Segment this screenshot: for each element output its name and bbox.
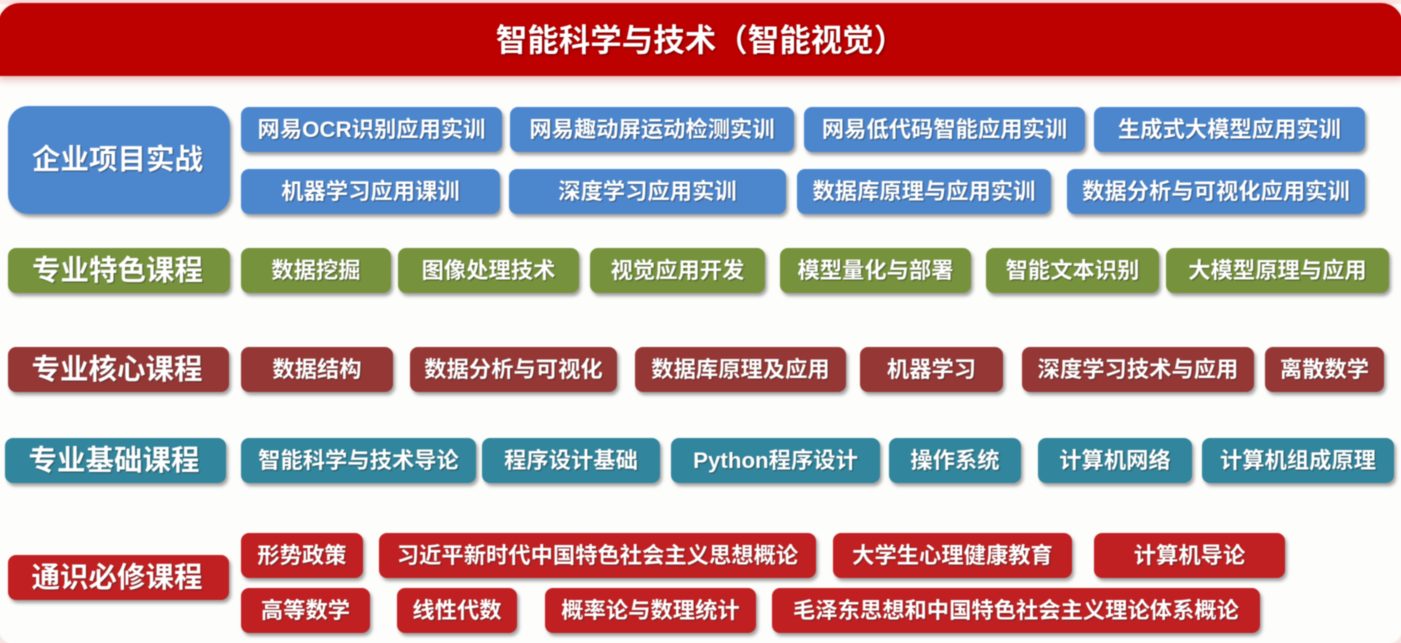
chip: 数据分析与可视化应用实训: 数据分析与可视化应用实训	[1082, 179, 1350, 204]
chip: 操作系统: 操作系统	[910, 448, 1000, 473]
chip: 数据挖掘: 数据挖掘	[271, 258, 361, 283]
row label: 通识必修课程: 通识必修课程	[31, 562, 202, 594]
row label: 企业项目实战	[8, 106, 230, 214]
chip: 离散数学: 离散数学	[1280, 357, 1369, 382]
row label: 企业项目实战: 企业项目实战	[32, 144, 203, 176]
chip: 机器学习应用课训: 机器学习应用课训	[281, 179, 460, 204]
row label: 专业核心课程	[8, 347, 229, 392]
chip: 数据挖掘	[241, 248, 391, 293]
panel: 通识必修课程	[7, 532, 1290, 638]
chip: 模型量化与部署: 模型量化与部署	[797, 258, 954, 283]
chip: 机器学习: 机器学习	[887, 357, 976, 382]
chip: 大模型原理与应用	[1166, 248, 1389, 293]
chip: 形势政策	[241, 533, 363, 578]
row label: 专业核心课程: 专业核心课程	[31, 354, 202, 386]
chip: 程序设计基础	[482, 438, 660, 483]
chip: 计算机导论: 计算机导论	[1134, 543, 1245, 568]
chip: 图像处理技术: 图像处理技术	[422, 258, 555, 283]
chip: 数据分析与可视化: 数据分析与可视化	[424, 357, 603, 382]
chip: 图像处理技术	[398, 248, 579, 293]
chip: 概率论与数理统计: 概率论与数理统计	[561, 598, 740, 623]
chip: 视觉应用开发: 视觉应用开发	[611, 258, 744, 283]
chip: 生成式大模型应用实训: 生成式大模型应用实训	[1118, 117, 1341, 142]
chip: 程序设计基础: 程序设计基础	[504, 448, 638, 473]
chip: 数据结构	[241, 347, 393, 392]
chip: 大模型原理与应用: 大模型原理与应用	[1188, 258, 1367, 283]
chip: 毛泽东思想和中国特色社会主义理论体系概论	[772, 588, 1260, 633]
chip: 计算机导论	[1094, 533, 1285, 578]
chip: 习近平新时代中国特色社会主义思想概论	[379, 533, 816, 578]
chip: 生成式大模型应用实训	[1094, 107, 1365, 152]
chip: 网易OCR识别应用实训	[241, 107, 502, 152]
chip: 智能科学与技术导论: 智能科学与技术导论	[258, 448, 459, 473]
chip: 深度学习应用实训	[509, 169, 786, 214]
chip: 机器学习应用课训	[241, 169, 500, 214]
chip: 形势政策: 形势政策	[257, 543, 347, 568]
chip: 深度学习技术与应用: 深度学习技术与应用	[1038, 357, 1238, 382]
row label: 专业特色课程	[8, 248, 230, 293]
chip: 数据分析与可视化应用实训	[1067, 169, 1365, 214]
chip: 智能文本识别: 智能文本识别	[1006, 258, 1139, 283]
chip: 计算机网络: 计算机网络	[1059, 448, 1171, 473]
chip: 网易OCR识别应用实训: 网易OCR识别应用实训	[258, 117, 485, 142]
chip: 计算机网络	[1038, 438, 1192, 483]
chip: 线性代数	[397, 588, 517, 633]
chip: 数据库原理与应用实训	[797, 169, 1051, 214]
chip: 深度学习应用实训: 深度学习应用实训	[558, 179, 737, 204]
chip: 网易低代码智能应用实训	[804, 107, 1085, 152]
chip: 离散数学	[1265, 347, 1384, 392]
chip: 大学生心理健康教育: 大学生心理健康教育	[852, 543, 1053, 568]
chip: 网易趣动屏运动检测实训	[510, 107, 794, 152]
chip: 数据库原理与应用实训: 数据库原理与应用实训	[812, 179, 1035, 204]
chip: 数据库原理及应用	[635, 347, 846, 392]
title banner: 智能科学与技术（智能视觉）	[496, 22, 905, 58]
chip: 网易趣动屏运动检测实训: 网易趣动屏运动检测实训	[529, 117, 775, 142]
panel: 专业核心课程	[7, 346, 1388, 398]
chip: Python程序设计	[671, 438, 880, 483]
chip: 计算机组成原理	[1202, 438, 1394, 483]
title banner	[0, 3, 1401, 76]
panel: 企业项目实战	[7, 105, 1370, 220]
chip: 机器学习	[860, 347, 1003, 392]
chip: 视觉应用开发	[590, 248, 765, 293]
panel: 专业基础课程	[4, 437, 1398, 488]
chip: 毛泽东思想和中国特色社会主义理论体系概论: 毛泽东思想和中国特色社会主义理论体系概论	[793, 598, 1239, 623]
chip: Python程序设计: Python程序设计	[693, 448, 858, 473]
row label: 专业基础课程	[5, 438, 226, 483]
chip: 智能科学与技术导论	[241, 438, 476, 483]
chip: 深度学习技术与应用	[1022, 347, 1254, 392]
chip: 智能文本识别	[986, 248, 1159, 293]
chip: 大学生心理健康教育	[833, 533, 1072, 578]
row label: 专业基础课程: 专业基础课程	[28, 445, 200, 477]
chip: 网易低代码智能应用实训: 网易低代码智能应用实训	[822, 117, 1067, 142]
row label: 通识必修课程	[8, 555, 229, 600]
chip: 高等数学	[241, 588, 370, 633]
chip: 数据库原理及应用: 数据库原理及应用	[651, 357, 830, 382]
chip: 数据结构: 数据结构	[272, 357, 362, 382]
chip: 线性代数: 线性代数	[412, 598, 502, 623]
chip: 概率论与数理统计	[545, 588, 756, 633]
chip: 模型量化与部署	[780, 248, 971, 293]
chip: 计算机组成原理: 计算机组成原理	[1220, 448, 1376, 473]
chip: 数据分析与可视化	[410, 347, 617, 392]
row label: 专业特色课程: 专业特色课程	[32, 255, 203, 287]
chip: 操作系统	[889, 438, 1021, 483]
chip: 习近平新时代中国特色社会主义思想概论: 习近平新时代中国特色社会主义思想概论	[397, 543, 798, 568]
panel: 专业特色课程	[7, 247, 1394, 298]
chip: 高等数学: 高等数学	[261, 598, 350, 623]
